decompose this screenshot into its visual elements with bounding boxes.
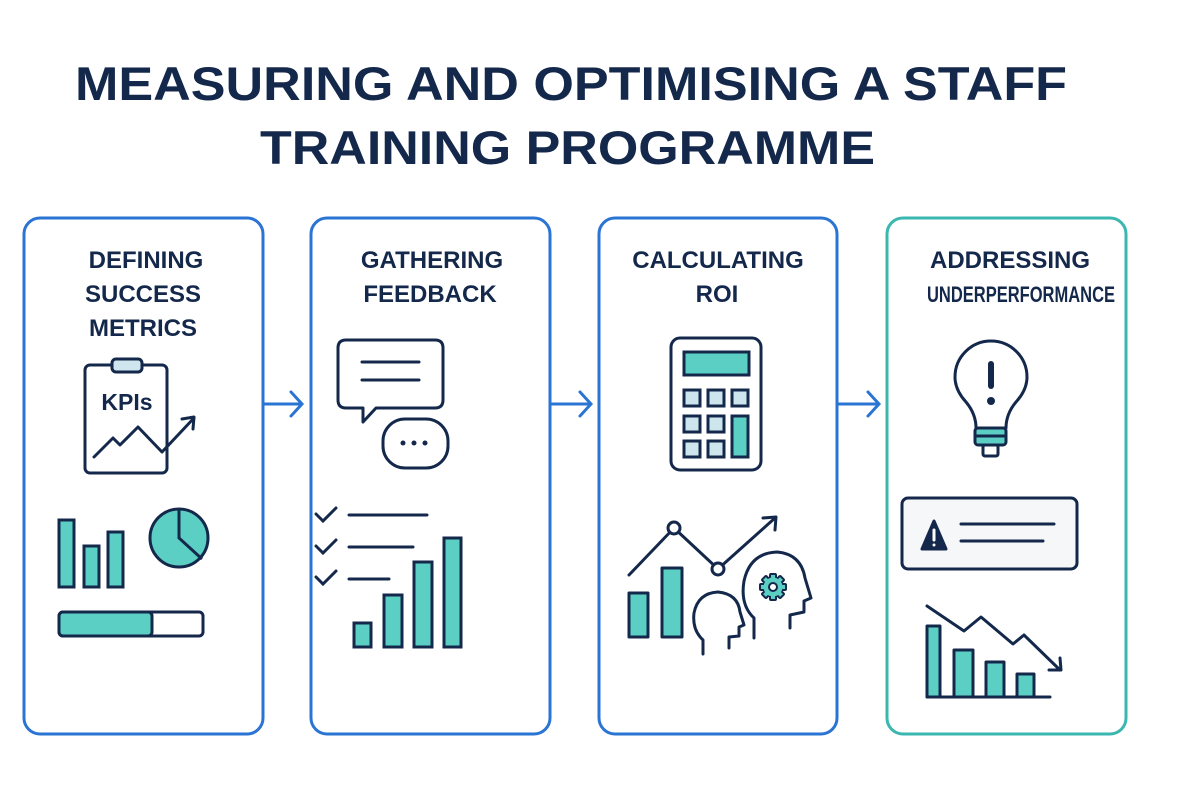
icon: calculator xyxy=(671,338,761,470)
heading: defining success metrics: DEFINING xyxy=(89,247,203,274)
icon: lightbulb xyxy=(955,341,1027,456)
heading: calculating ROI xyxy=(632,247,804,308)
heading: defining success metrics: SUCCESS xyxy=(85,281,201,308)
heading: calculating ROI: CALCULATING xyxy=(632,247,804,274)
icon: KPI clipboard xyxy=(85,359,194,473)
panel: gathering feedback xyxy=(311,218,550,734)
panel: calculating ROI xyxy=(599,218,837,734)
arrow xyxy=(263,392,302,416)
heading: gathering feedback xyxy=(361,247,503,308)
icon: speech bubbles xyxy=(338,340,448,468)
arrow xyxy=(838,392,879,416)
heading: defining success metrics: METRICS xyxy=(89,315,197,342)
panel: defining success metrics xyxy=(24,218,263,734)
heading: gathering feedback: FEEDBACK xyxy=(363,281,497,308)
checklist xyxy=(316,508,427,584)
declining bar chart xyxy=(927,606,1061,697)
heading: addressing underperformance xyxy=(927,247,1115,307)
heading: defining success metrics xyxy=(85,247,203,342)
progress bar xyxy=(59,612,203,636)
heading: gathering feedback: GATHERING xyxy=(361,247,503,274)
icon: pie chart xyxy=(150,509,208,567)
alert box xyxy=(902,498,1077,569)
icon: KPI clipboard: KPIs xyxy=(101,389,153,415)
heading: addressing underperformance: UNDERPERFORMANCE xyxy=(927,282,1115,307)
chart with heads xyxy=(629,517,811,654)
title: TRAINING PROGRAMME xyxy=(260,121,875,174)
title xyxy=(75,57,1067,174)
bar chart xyxy=(59,520,123,587)
bar chart xyxy=(354,538,461,647)
arrow xyxy=(550,392,591,416)
heading: addressing underperformance: ADDRESSING xyxy=(930,247,1090,274)
heading: calculating ROI: ROI xyxy=(696,281,738,308)
title: MEASURING AND OPTIMISING A STAFF xyxy=(75,57,1067,110)
panel: addressing underperformance xyxy=(887,218,1126,734)
